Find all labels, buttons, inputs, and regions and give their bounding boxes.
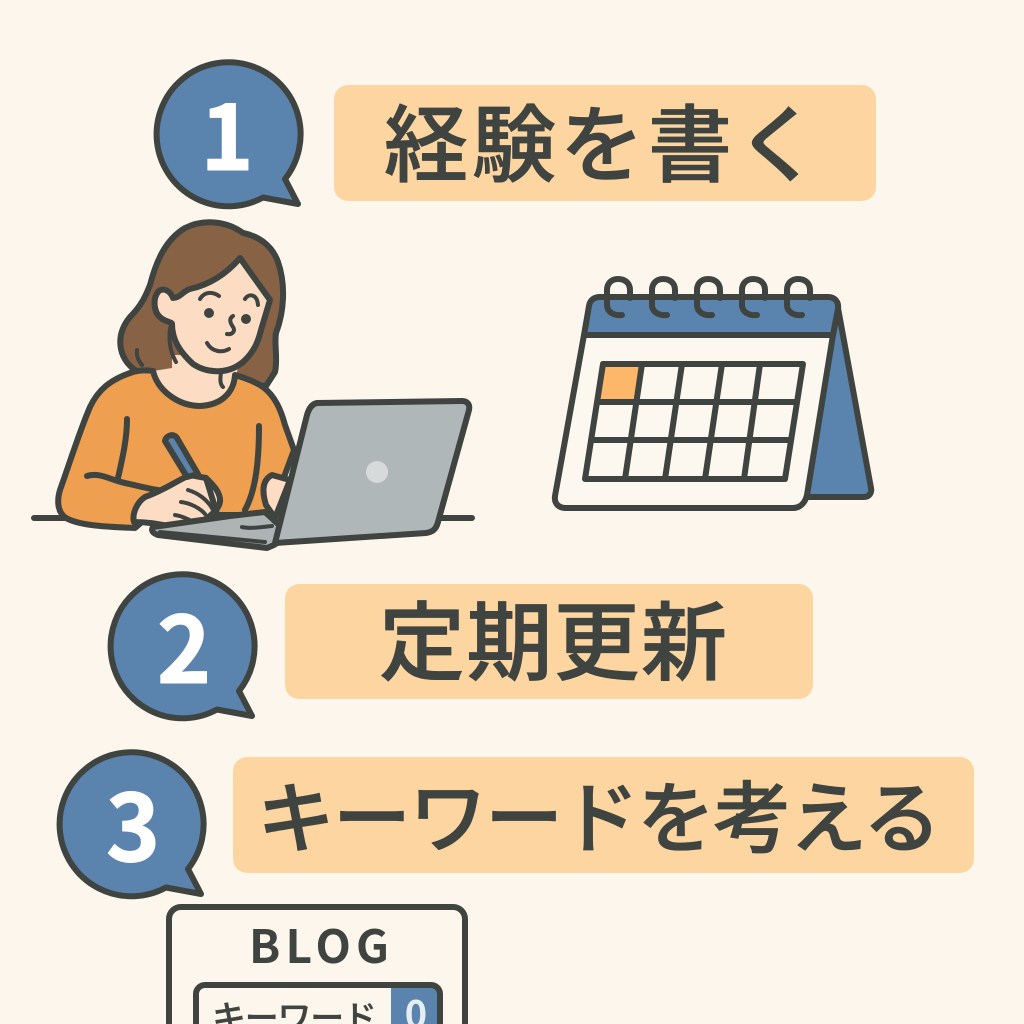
- keyword search box: [196, 984, 440, 1024]
- step 1 number bubble: [157, 62, 301, 206]
- calendar header: [584, 297, 838, 335]
- step 3 number bubble: [60, 752, 204, 896]
- illustration: blog page card: [169, 907, 465, 1024]
- step 2 number bubble: 2: [157, 577, 211, 710]
- keyboard base: [152, 512, 290, 548]
- step 3 heading: キーワードを考える: [257, 775, 941, 863]
- step 2 number bubble: [111, 574, 255, 718]
- step 1 number bubble: 1: [200, 66, 254, 196]
- hair strand: [137, 328, 223, 387]
- face details: [200, 293, 258, 351]
- step 1 heading: 経験を書く: [384, 99, 820, 193]
- face: [155, 258, 270, 371]
- illustration: woman writing at laptop: [34, 222, 472, 548]
- eyes: [204, 308, 214, 318]
- calendar rings: [607, 279, 810, 315]
- calendar page: [555, 335, 833, 508]
- laptop logo: [366, 461, 388, 483]
- step 3 number bubble: 3: [106, 755, 160, 888]
- neck: [153, 355, 240, 406]
- keyboard details: [160, 526, 272, 542]
- laptop lid: [275, 401, 469, 543]
- writing hand: [133, 475, 220, 527]
- sweater folds: [87, 419, 259, 510]
- highlighted day: [600, 366, 641, 401]
- blog title: BLOG: [249, 911, 389, 977]
- calendar stand: [806, 308, 871, 497]
- hand fingers: [175, 490, 213, 523]
- hair: [120, 222, 283, 386]
- table line: [34, 515, 472, 521]
- illustration: desk calendar: [555, 279, 871, 508]
- far hand: [264, 475, 290, 518]
- pen: [165, 435, 198, 477]
- step 2 heading: 定期更新: [379, 596, 727, 692]
- sweater: [58, 370, 294, 528]
- step 2 heading: [285, 584, 813, 699]
- step 1 heading: [334, 85, 876, 201]
- calendar grid: [585, 364, 803, 479]
